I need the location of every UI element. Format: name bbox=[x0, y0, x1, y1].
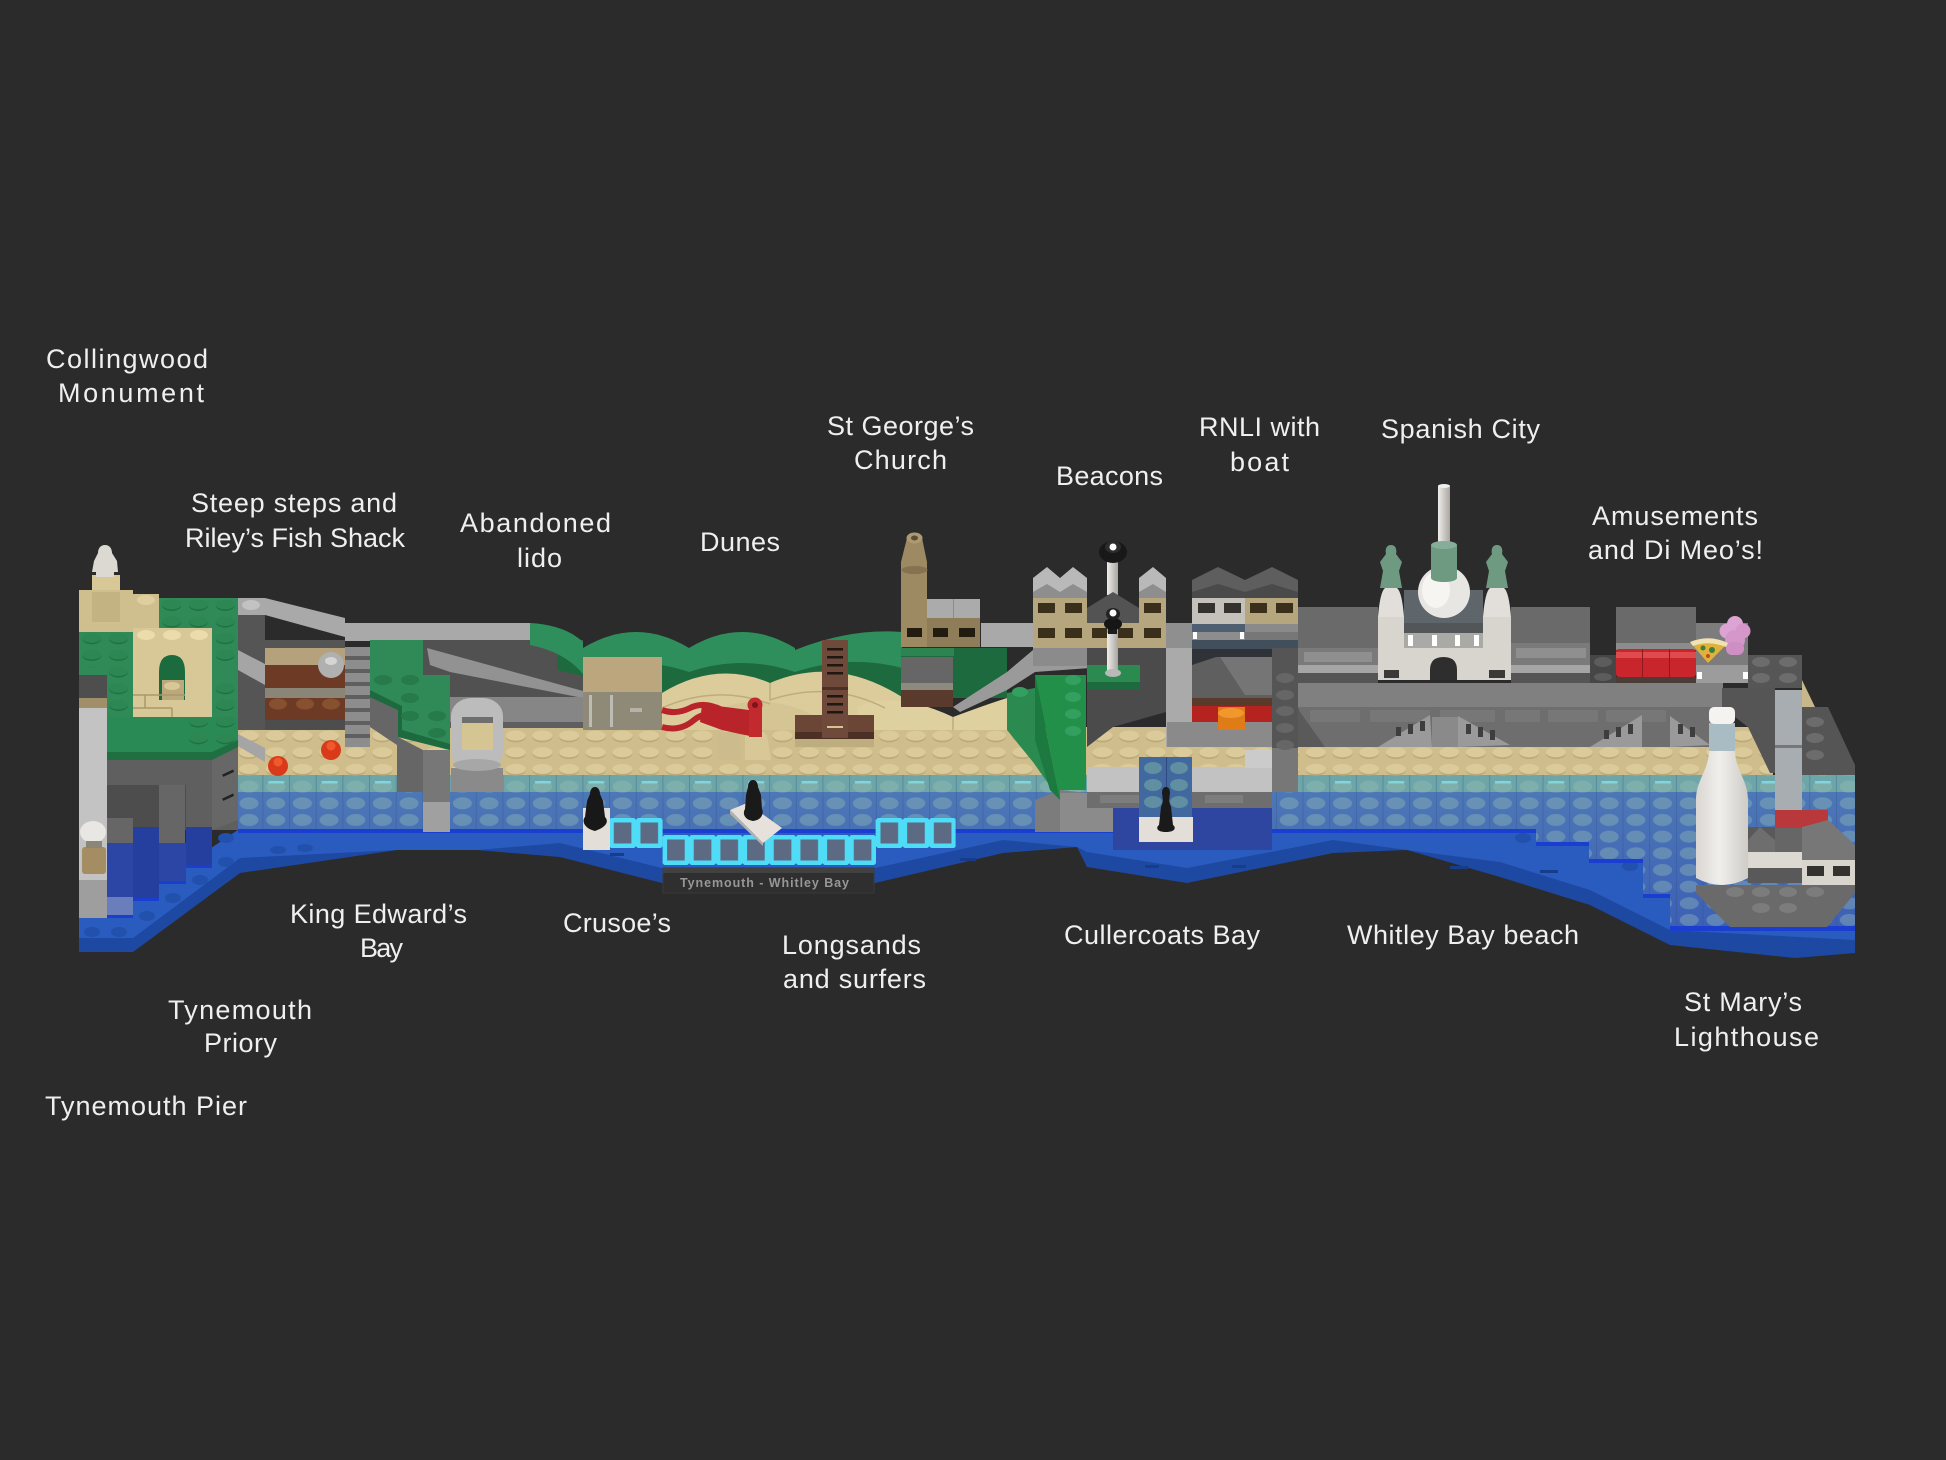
label: RNLI with boat: RNLI with bbox=[1199, 412, 1320, 442]
St Mary's Lighthouse island bbox=[1696, 680, 1855, 927]
label: Collingwood Monument: Monument bbox=[58, 378, 204, 408]
label: RNLI with boat: boat bbox=[1230, 447, 1289, 477]
beach hut bbox=[583, 657, 662, 730]
abandoned lido bbox=[451, 698, 503, 792]
surfer figure bbox=[730, 780, 782, 846]
label: Whitley Bay beach: Whitley Bay beach bbox=[1347, 920, 1579, 950]
dunes: sand mounds bbox=[662, 672, 1007, 730]
label: Amusements and Di Meo's: and Di Meo’s! bbox=[1588, 535, 1763, 565]
label: Collingwood Monument: Collingwood bbox=[46, 344, 208, 374]
label: Abandoned lido: lido bbox=[517, 543, 562, 573]
ice cream bbox=[1720, 616, 1750, 655]
St George's Church bbox=[901, 532, 1090, 712]
Spanish City building bbox=[1298, 484, 1723, 747]
Collingwood Monument bbox=[92, 545, 120, 590]
label: Steep steps and Riley's Fish Shack: Steep steps and bbox=[191, 488, 397, 518]
sea: translucent bricks bbox=[238, 775, 1855, 931]
label: St Mary's Lighthouse: Lighthouse bbox=[1674, 1022, 1819, 1052]
label: St George's Church: St George’s bbox=[827, 411, 974, 441]
brick skyline model bbox=[79, 484, 1855, 958]
label: St Mary's Lighthouse: St Mary’s bbox=[1684, 987, 1802, 1017]
sand beach with studs bbox=[238, 727, 1773, 775]
label: Beacons: Beacons bbox=[1056, 461, 1163, 491]
label: St George's Church: Church bbox=[854, 445, 947, 475]
label: Amusements and Di Meo's: Amusements bbox=[1592, 501, 1758, 531]
label: King Edward's Bay: Bay bbox=[360, 933, 404, 963]
grey stud column bbox=[1272, 648, 1298, 792]
label: Longsands and surfers: and surfers bbox=[783, 964, 926, 994]
label: Tynemouth Priory: Tynemouth bbox=[168, 995, 312, 1025]
label: Tynemouth Pier: Tynemouth Pier bbox=[45, 1091, 247, 1121]
upper promenade road bbox=[238, 598, 583, 728]
Crusoe's statue bbox=[583, 787, 610, 850]
label: Dunes: Dunes bbox=[700, 527, 780, 557]
label: Crusoe's: Crusoe’s bbox=[563, 908, 671, 938]
Riley's Fish Shack and steep steps bbox=[238, 600, 370, 776]
pizza slice bbox=[1690, 638, 1728, 663]
label: Tynemouth Priory: Priory bbox=[204, 1028, 278, 1058]
label: Abandoned lido: Abandoned bbox=[460, 508, 611, 538]
surfboard display blocks bbox=[609, 818, 956, 865]
dunes: green grass arcs bbox=[530, 623, 903, 698]
green cliff slope and grey columns bbox=[370, 640, 450, 832]
label: King Edward's Bay: King Edward’s bbox=[290, 899, 467, 929]
Tynemouth Pier bbox=[79, 708, 212, 918]
label: Cullercoats Bay: Cullercoats Bay bbox=[1064, 920, 1260, 950]
Beacons with houses bbox=[1033, 541, 1166, 747]
label: Spanish City: Spanish City bbox=[1381, 414, 1540, 444]
Cullercoats Bay bbox=[1007, 675, 1272, 850]
model plaque bbox=[663, 868, 874, 893]
label: Steep steps and Riley's Fish Shack: Riley’s Fish Shack bbox=[185, 523, 406, 553]
lifeguard ladder bbox=[795, 640, 874, 747]
blue sea base plate bbox=[79, 830, 1855, 958]
model plaque: Tynemouth - Whitley Bay bbox=[680, 876, 849, 890]
red flag bbox=[662, 698, 771, 760]
cliff and Tynemouth Priory bbox=[79, 590, 238, 830]
Amusements and Di Meo's bbox=[1590, 607, 1802, 688]
RNLI station with boat bbox=[1166, 567, 1298, 747]
label: Longsands and surfers: Longsands bbox=[782, 930, 921, 960]
